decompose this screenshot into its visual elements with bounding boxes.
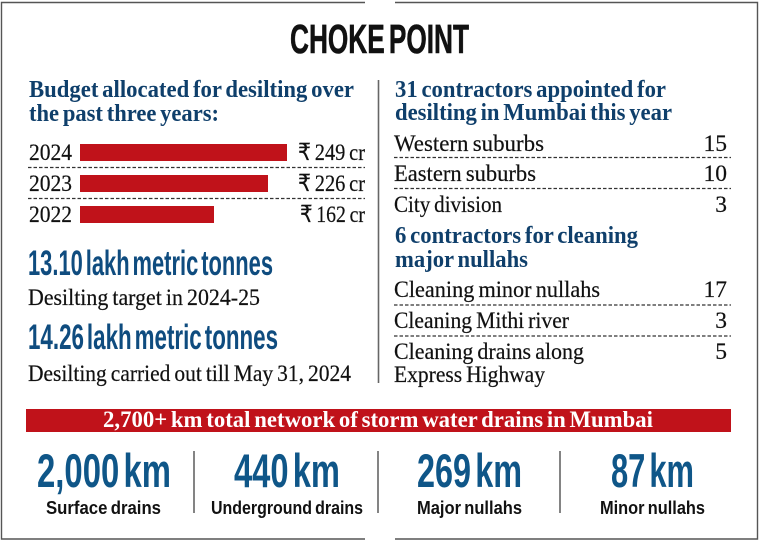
bar row: 2024 [29, 140, 365, 166]
bar row: 2022 [29, 202, 365, 228]
heading: budget allocated [29, 77, 354, 127]
bar row: 2022: 2022 [29, 202, 72, 228]
stat: underground drains: 440 km [234, 444, 340, 497]
bar chart: budget by year [28, 140, 365, 228]
stat: surface drains: Surface drains [46, 497, 161, 518]
heading: 31 contractors: desilting in Mumbai this year [395, 100, 672, 126]
bar row: 2023 [29, 171, 365, 197]
table: desilting contractors: Western suburbs [394, 131, 544, 157]
table: desilting contractors [394, 131, 731, 218]
stat: desilting target [28, 244, 273, 311]
stat: major nullahs [417, 444, 522, 518]
stat: surface drains [37, 444, 171, 518]
heading: 6 contractors: major nullahs [395, 247, 528, 273]
heading: budget allocated: the past three years: [29, 101, 219, 127]
stat: minor nullahs: Minor nullahs [600, 497, 705, 518]
stat: desilting carried out: 14.26 lakh metric tonnes [28, 318, 278, 357]
table: desilting contractors: City division [394, 192, 502, 218]
table: nullah contractors [394, 277, 731, 388]
heading: 31 contractors [395, 77, 672, 126]
heading: 6 contractors: 6 contractors for cleaning [395, 223, 638, 249]
stat: desilting carried out: Desilting carried out till May 31, 2024 [28, 361, 351, 387]
stat: desilting carried out [28, 318, 351, 387]
table: nullah contractors: 5 [715, 339, 727, 365]
title: CHOKE POINT [290, 16, 469, 62]
table: nullah contractors: Express Highway [394, 362, 545, 388]
table: nullah contractors: Cleaning drains along [394, 339, 584, 365]
bar row: 2022: ₹ 162 cr [300, 202, 365, 228]
stat: surface drains: 2,000 km [37, 444, 171, 497]
table: desilting contractors: Eastern suburbs [394, 161, 536, 187]
bar row: 2024: 2024 [29, 140, 72, 166]
bar row: 2024: ₹ 249 cr [298, 140, 365, 166]
heading: 31 contractors: 31 contractors appointed for [395, 77, 666, 103]
table: desilting contractors: 15 [704, 131, 727, 157]
table: desilting contractors: 3 [715, 192, 727, 218]
stat: underground drains: Underground drains [211, 497, 363, 518]
stat: minor nullahs [600, 444, 705, 518]
bar row: 2023: 2023 [29, 171, 72, 197]
table: nullah contractors: 3 [715, 308, 727, 334]
banner: total network: 2,700+ km total network of storm water drains in Mumbai [103, 407, 653, 433]
table: nullah contractors: Cleaning Mithi river [394, 308, 569, 334]
stat: desilting target: 13.10 lakh metric tonnes [28, 244, 273, 283]
stat: desilting target: Desilting target in 2024-25 [28, 285, 260, 311]
stat: underground drains [211, 444, 363, 518]
table: desilting contractors: 10 [704, 161, 727, 187]
stat: major nullahs: 269 km [417, 444, 522, 497]
panel: contractors [394, 77, 731, 388]
heading: budget allocated: Budget allocated for desilting over [29, 77, 354, 103]
panel: budget and desilting [28, 77, 365, 387]
table: nullah contractors: Cleaning minor nullahs [394, 277, 600, 303]
table: nullah contractors: 17 [704, 277, 727, 303]
stat: major nullahs: Major nullahs [417, 497, 522, 518]
bar row: 2023: ₹ 226 cr [298, 171, 365, 197]
heading: 6 contractors [395, 223, 638, 273]
stat: minor nullahs: 87 km [611, 444, 694, 497]
